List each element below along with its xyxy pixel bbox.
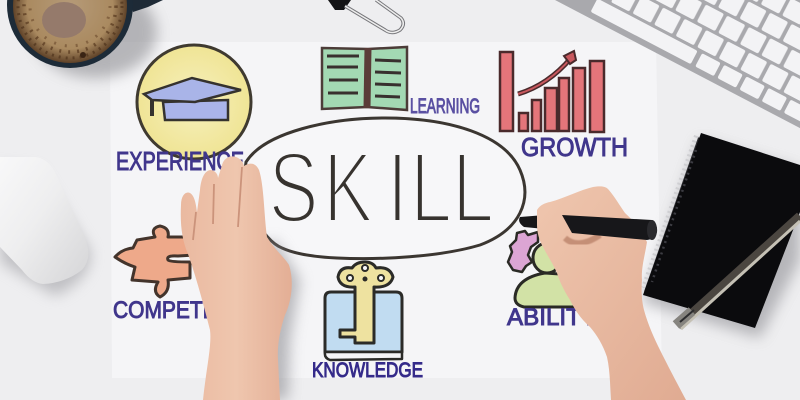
computer mouse <box>0 157 90 296</box>
keyboard <box>502 0 800 204</box>
icon: key on book <box>325 262 402 360</box>
right hand <box>537 186 686 400</box>
icon: puzzle piece <box>115 226 195 297</box>
binder clip <box>328 0 403 32</box>
knowledge label: KNOWLEDGE <box>312 359 423 382</box>
skill title: SKILL <box>269 131 494 243</box>
marker pen <box>562 215 657 240</box>
ability label: ABILITY <box>507 304 597 331</box>
marker tip <box>519 215 545 229</box>
central skill oval <box>245 118 525 259</box>
space bar <box>591 0 698 64</box>
coffee cup <box>7 0 163 78</box>
left hand <box>181 156 300 400</box>
growth label: GROWTH <box>521 132 628 162</box>
icon: open book <box>322 47 407 110</box>
experience label: EXPERIENCE <box>116 146 244 176</box>
notebook <box>642 133 800 338</box>
competence label: COMPETENCE <box>113 297 261 324</box>
paper sheet <box>110 42 662 378</box>
icon: growth bar chart <box>500 51 604 132</box>
learning label: LEARNING <box>410 95 480 118</box>
icon: graduation cap <box>137 45 251 159</box>
pen on notebook <box>676 216 800 329</box>
icon: ability person and gear <box>508 231 575 307</box>
